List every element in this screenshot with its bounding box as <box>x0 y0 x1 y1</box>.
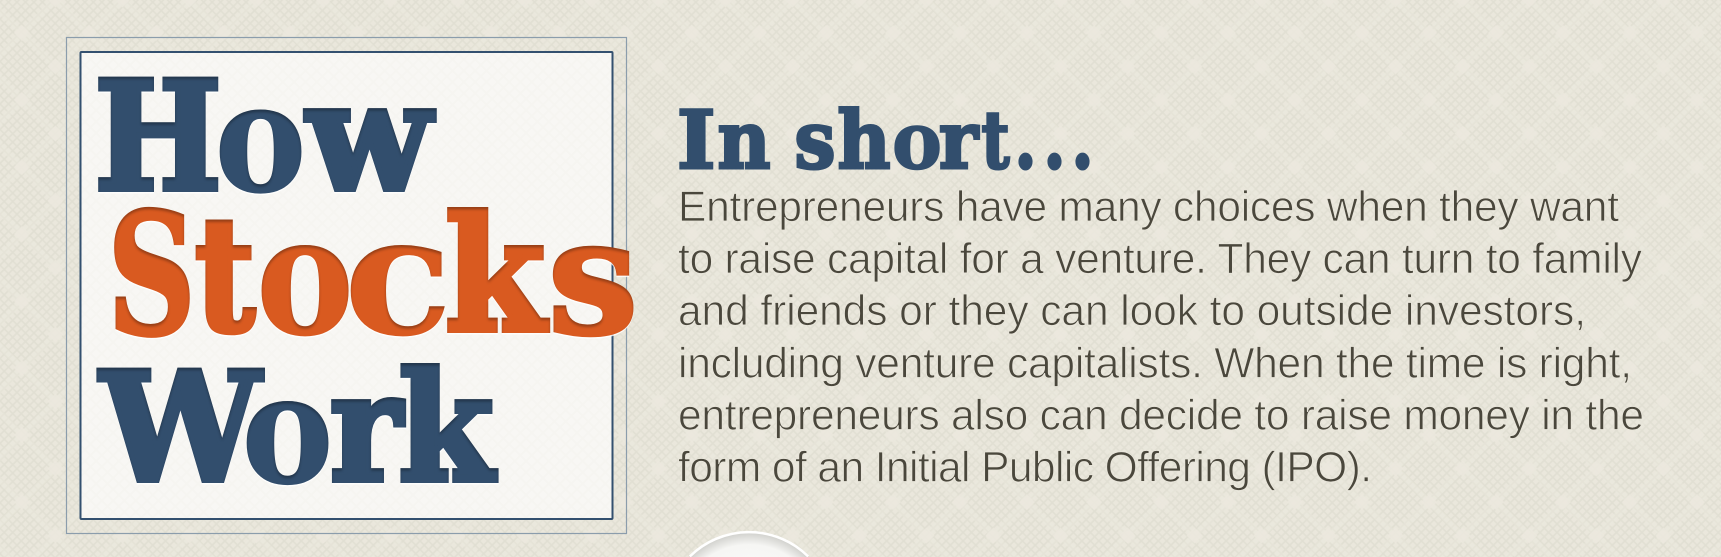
heading: In short: n <box>718 93 770 187</box>
heading: In short: t <box>982 93 1010 187</box>
title word: How: H <box>95 49 222 225</box>
text block: intro paragraph: entrepreneurs also can decide to raise money in the <box>678 392 1644 440</box>
text block: intro paragraph: Entrepreneurs have many choices when they want <box>678 184 1619 231</box>
title word: Stocks <box>108 176 638 374</box>
title word: Work: o <box>242 340 334 518</box>
title word: Stocks: c <box>344 178 452 372</box>
heading: In short: h <box>838 93 890 187</box>
title word: How: o <box>214 48 306 227</box>
heading: In short: . <box>1072 93 1094 187</box>
title word: How: w <box>305 49 435 225</box>
heading: In short: I <box>677 93 716 187</box>
heading: In short: r <box>939 93 979 187</box>
title word: How <box>95 48 435 227</box>
title word: Work: W <box>99 340 263 516</box>
heading: In short: s <box>794 93 836 187</box>
text block: intro paragraph: including venture capitalists. When the time is right, <box>678 340 1632 388</box>
title word: Stocks: s <box>548 183 638 371</box>
title word: Stocks: k <box>445 183 548 368</box>
title word: Work <box>99 340 496 518</box>
text block: intro paragraph: form of an Initial Public Offering (IPO). <box>678 445 1372 492</box>
inner panel <box>80 52 612 519</box>
title word: Stocks: S <box>108 176 196 374</box>
text block: intro paragraph: and friends or they can look to outside investors, <box>678 288 1586 335</box>
title word: Work: k <box>398 340 496 516</box>
heading: In short: o <box>892 94 942 188</box>
heading: In short <box>677 93 1094 188</box>
text block: intro paragraph: to raise capital for a venture. They can turn to family <box>678 236 1643 283</box>
panel: title card <box>66 38 626 534</box>
title <box>95 48 638 518</box>
icon: circle badge cut off at bottom <box>689 532 809 557</box>
heading: In short: . <box>1014 93 1036 187</box>
title word: Stocks: t <box>195 183 255 368</box>
title word: Stocks: o <box>256 178 354 372</box>
title word: Work: r <box>330 340 404 516</box>
heading: In short: . <box>1044 93 1066 187</box>
outer frame <box>66 38 626 534</box>
text block: intro paragraph <box>678 184 1644 492</box>
